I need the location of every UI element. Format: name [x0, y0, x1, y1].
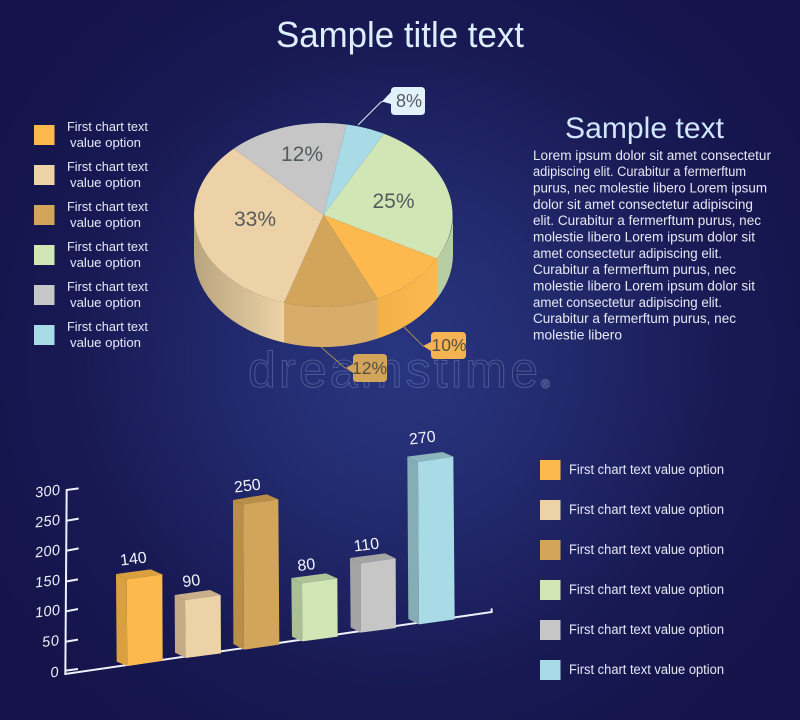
- left legend: [34, 119, 148, 350]
- pie side: orange: [378, 258, 437, 339]
- lorem ipsum text block: elit. Curabitur a fermerftum purus, nec: [533, 213, 761, 228]
- legend row: cream: [540, 500, 724, 520]
- legend row: cream: First chart text value option: [569, 502, 724, 517]
- lorem ipsum text block: Curabitur a fermerftum purus, nec: [533, 311, 736, 326]
- callout: 12%: 12%: [352, 358, 387, 378]
- bar: 250: [233, 494, 279, 650]
- legend row: orange: [540, 460, 724, 480]
- legend row: green: First chart text value option: [569, 582, 724, 597]
- callout: 12%: [321, 347, 387, 382]
- legend row: green: [540, 580, 724, 600]
- bar value labels: 270: [408, 428, 437, 449]
- right legend: [540, 460, 724, 680]
- callout: 8%: 8%: [396, 91, 422, 111]
- legend row: blue: [540, 660, 724, 680]
- legend row: gray: First chart text value option: [569, 622, 724, 637]
- title: Sample title text: [276, 14, 524, 55]
- bar value labels: 90: [182, 572, 201, 591]
- lorem ipsum text block: molestie libero Lorem ipsum dolor sit: [533, 278, 755, 294]
- pie slice: gray 12%: [234, 123, 347, 215]
- lorem ipsum text block: amet consectetur adipiscing elit.: [533, 295, 722, 310]
- lorem ipsum text block: Curabitur a fermerftum purus, nec: [533, 262, 736, 277]
- callout: 8%: [358, 87, 425, 125]
- 3D pie chart: [194, 123, 453, 347]
- axis labels: 250: [33, 513, 61, 532]
- legend row: dark tan: [540, 540, 724, 560]
- lorem ipsum text block: adipiscing elit. Curabitur a fermerftum: [533, 164, 746, 179]
- lorem ipsum text block: molestie libero: [533, 328, 622, 342]
- legend row: gray: [540, 620, 724, 640]
- lorem ipsum text block: [533, 148, 771, 342]
- pie labels: 12%: [281, 143, 323, 166]
- bar: 140: [116, 569, 163, 666]
- legend row: dark tan: First chart text value option: [569, 542, 724, 557]
- watermark: dreamstime: [248, 342, 538, 398]
- legend item: green: First chart text: [67, 239, 148, 254]
- bar: 80: [291, 573, 338, 641]
- axis labels: 150: [34, 573, 61, 591]
- legend item: orange: First chart text: [67, 119, 148, 134]
- legend item: gray: value option: [70, 295, 141, 310]
- bar value labels: 80: [297, 556, 316, 575]
- axis labels: 100: [34, 603, 61, 621]
- callout: 10%: [403, 326, 467, 359]
- pie labels: 33%: [234, 208, 276, 231]
- legend item: cream: First chart text: [67, 159, 148, 174]
- bar value labels: 140: [119, 549, 148, 570]
- legend item: green: [34, 239, 148, 270]
- legend item: cream: [34, 159, 148, 190]
- callout: 10%: 10%: [431, 335, 467, 355]
- bar: 270: [407, 452, 455, 624]
- pie labels: 25%: [372, 190, 415, 213]
- pie slice: blue 8%: [324, 124, 384, 215]
- legend item: dark tan: [34, 199, 148, 230]
- axis labels: 0: [50, 665, 59, 681]
- pie slice: cream 33%: [194, 148, 324, 303]
- legend item: blue: [34, 319, 148, 350]
- legend item: orange: [34, 119, 148, 150]
- pie slice: orange 10%: [324, 215, 437, 299]
- sample text heading: Sample text: [565, 112, 725, 145]
- legend item: gray: [34, 279, 148, 310]
- legend item: green: value option: [70, 255, 141, 270]
- pie side: green: [437, 215, 453, 298]
- bar chart: [33, 428, 492, 681]
- legend row: orange: First chart text value option: [569, 462, 724, 477]
- pie labels: [234, 143, 415, 231]
- lorem ipsum text block: dolor sit amet consectetur adipiscing: [533, 197, 753, 212]
- lorem ipsum text block: purus, nec molestie libero Lorem ipsum: [533, 180, 767, 196]
- pie side: dark tan: [284, 299, 378, 347]
- pie side: cream: [194, 215, 284, 343]
- legend item: orange: value option: [70, 135, 141, 150]
- chart axes: [65, 488, 492, 674]
- legend item: blue: First chart text: [67, 319, 148, 334]
- lorem ipsum text block: molestie libero Lorem ipsum dolor sit: [533, 230, 755, 244]
- axis labels: 300: [34, 483, 61, 501]
- bar value labels: 110: [353, 536, 380, 556]
- legend item: cream: value option: [70, 175, 141, 190]
- bar: 110: [350, 553, 396, 633]
- lorem ipsum text block: Lorem ipsum dolor sit amet consectetur: [533, 148, 771, 163]
- axis labels: 200: [33, 543, 61, 562]
- legend item: dark tan: First chart text: [67, 199, 148, 214]
- pie slice: green 25%: [324, 134, 453, 258]
- watermark: ®: [541, 377, 550, 391]
- legend row: blue: First chart text value option: [569, 662, 724, 677]
- lorem ipsum text block: amet consectetur adipiscing elit.: [533, 246, 722, 261]
- legend item: gray: First chart text: [67, 279, 148, 294]
- axis labels: 50: [41, 633, 60, 651]
- bar: 90: [175, 590, 221, 658]
- legend item: dark tan: value option: [70, 215, 141, 230]
- axis labels: [33, 483, 61, 681]
- pie slice: dark tan 12%: [284, 215, 378, 307]
- bar value labels: 250: [233, 476, 262, 497]
- bar value labels: [119, 428, 437, 591]
- legend item: blue: value option: [70, 335, 141, 350]
